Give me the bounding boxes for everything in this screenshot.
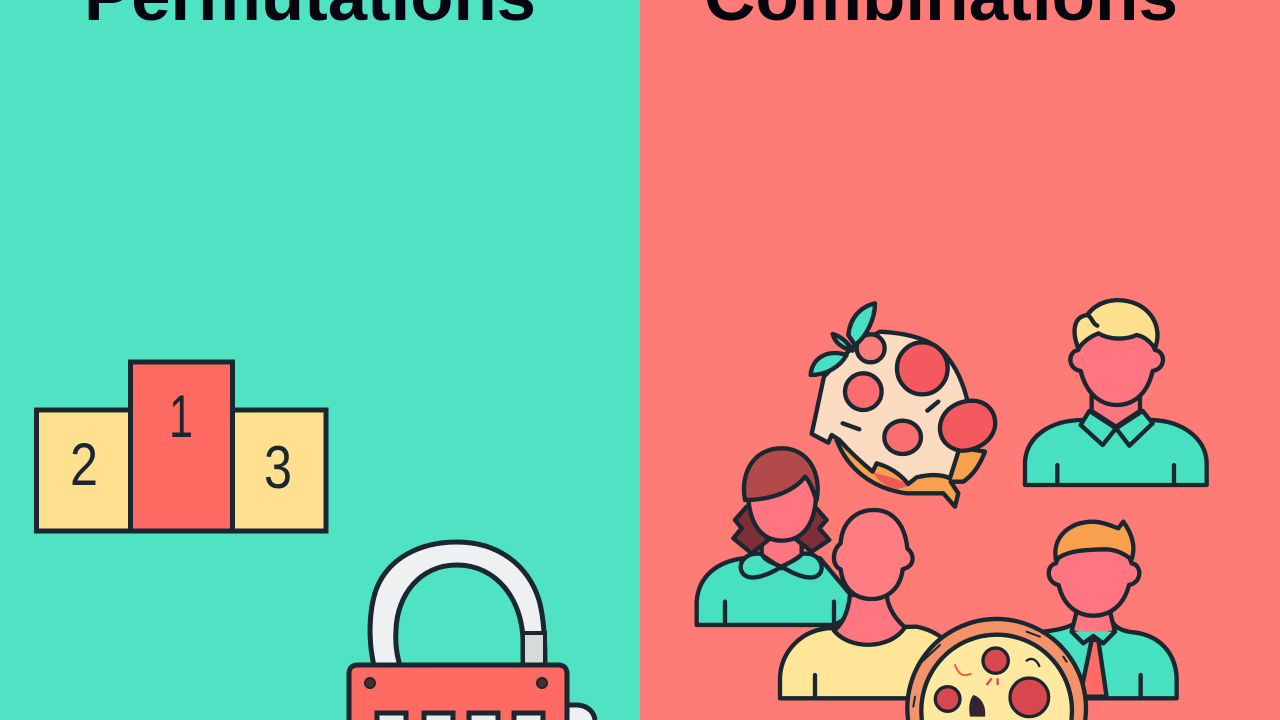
person: woman with brown hair (697, 448, 855, 625)
person: man with orange hair and tie (1043, 522, 1177, 698)
icon: winners podium: 3 (264, 434, 292, 501)
icon: winners podium: 2 (70, 431, 98, 498)
person: bald figure in yellow shirt (780, 510, 957, 698)
icon: combination padlock (349, 542, 595, 720)
icon: winners podium (36, 362, 326, 531)
icon: winners podium: 1 (169, 383, 193, 450)
icon: pizza slice (811, 303, 995, 507)
icon: whole pizza (907, 619, 1086, 720)
panel: combinations (640, 0, 1280, 720)
person: man with blond hair (1025, 300, 1207, 485)
panel: permutations (0, 0, 640, 720)
